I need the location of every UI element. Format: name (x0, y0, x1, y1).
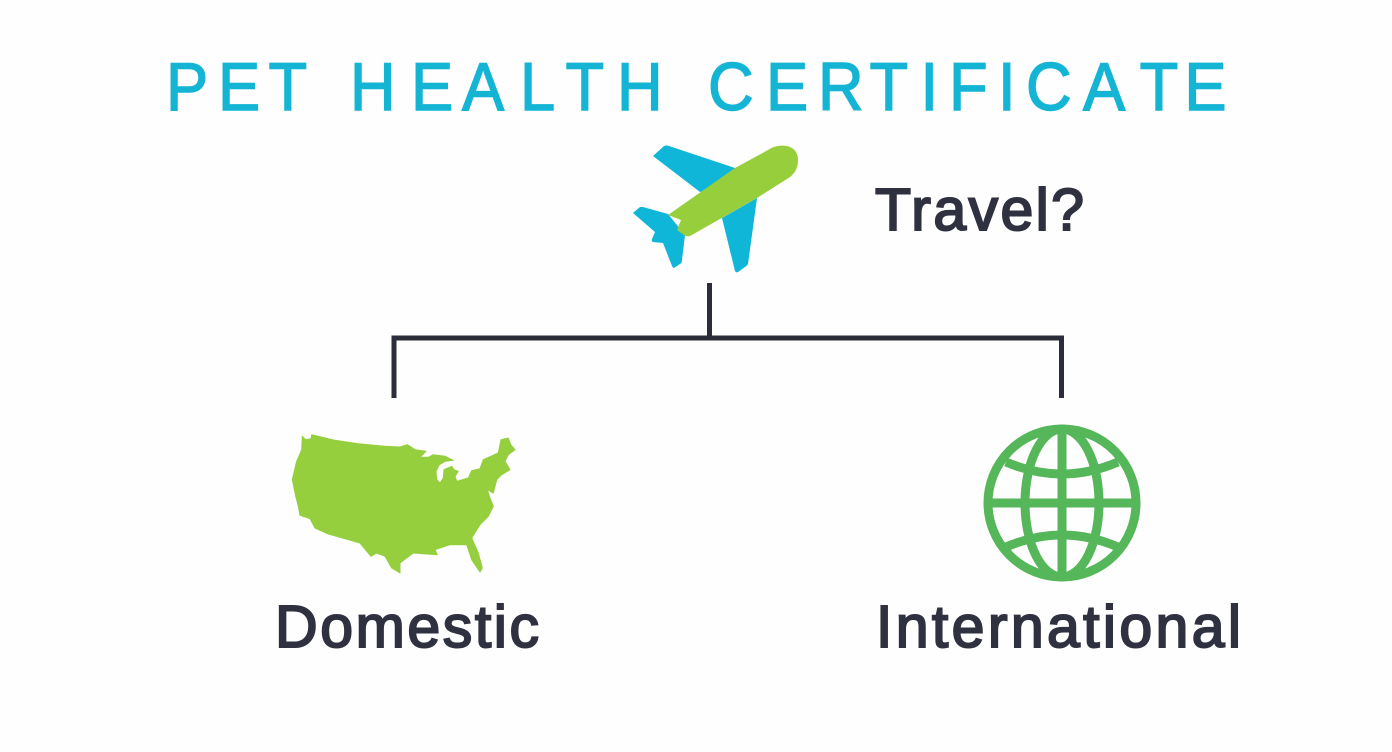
title: PET (166, 49, 307, 124)
title: CERTIFICATE (708, 49, 1227, 124)
label: Domestic: Domestic (275, 594, 539, 660)
title: HEALTH (350, 49, 663, 124)
title (166, 49, 1227, 124)
connector: decision tree branches (394, 283, 1062, 398)
icon: airplane (633, 146, 798, 272)
label: International: International (876, 594, 1241, 660)
icon: map of United States (292, 435, 515, 573)
label: Travel?: Travel? (875, 177, 1084, 243)
icon: globe (988, 429, 1136, 577)
